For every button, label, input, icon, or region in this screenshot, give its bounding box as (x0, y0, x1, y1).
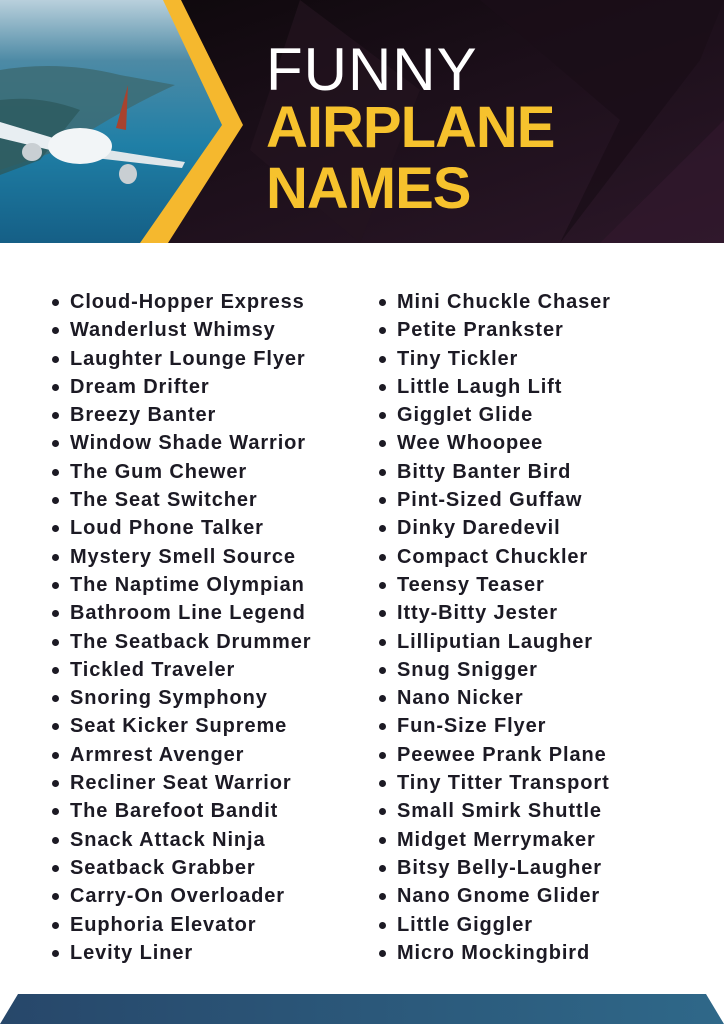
title (266, 36, 554, 221)
header banner (0, 0, 724, 243)
list: left column: Snack Attack Ninja (70, 829, 266, 851)
list: left column: Armrest Avenger (70, 744, 244, 766)
list: right column: Micro Mockingbird (397, 942, 590, 964)
list: right column: Little Giggler (397, 914, 533, 936)
list: right column: Dinky Daredevil (397, 517, 561, 539)
list: left column: Breezy Banter (70, 404, 216, 426)
list: left column: Dream Drifter (70, 376, 210, 398)
photo: sea and plane (0, 0, 240, 243)
list: right column: Tiny Tickler (397, 348, 518, 370)
list: left column: Levity Liner (70, 942, 193, 964)
list: left column: Seat Kicker Supreme (70, 715, 287, 737)
title: AIRPLANE (266, 95, 554, 160)
list: right column: Mini Chuckle Chaser (397, 291, 611, 313)
title: NAMES (266, 156, 470, 221)
list: left column: Snoring Symphony (70, 687, 268, 709)
list: left column: Recliner Seat Warrior (70, 772, 292, 794)
title: FUNNY (266, 36, 478, 103)
list: right column: Pint-Sized Guffaw (397, 489, 582, 511)
list: left column (52, 291, 311, 964)
list: left column: Mystery Smell Source (70, 546, 296, 568)
list: right column: Bitty Banter Bird (397, 461, 571, 483)
list: right column: Fun-Size Flyer (397, 715, 546, 737)
list: left column: Bathroom Line Legend (70, 602, 306, 624)
list: left column: Seatback Grabber (70, 857, 256, 879)
list: right column: Bitsy Belly-Laugher (397, 857, 602, 879)
list: right column: Teensy Teaser (397, 574, 545, 596)
icon: airplane (0, 85, 185, 184)
list: left column: The Gum Chewer (70, 461, 247, 483)
list: right column: Tiny Titter Transport (397, 772, 610, 794)
list: left column: The Seat Switcher (70, 489, 258, 511)
list: left column: The Seatback Drummer (70, 631, 311, 653)
footer bar (0, 994, 724, 1024)
list: right column: Snug Snigger (397, 659, 538, 681)
list: left column: The Naptime Olympian (70, 574, 305, 596)
list: right column: Wee Whoopee (397, 432, 543, 454)
list: left column: The Barefoot Bandit (70, 800, 278, 822)
list: left column: Laughter Lounge Flyer (70, 348, 306, 370)
list: right column: Midget Merrymaker (397, 829, 596, 851)
list: left column: Carry-On Overloader (70, 885, 285, 907)
list: right column: Itty-Bitty Jester (397, 602, 558, 624)
list: right column: Compact Chuckler (397, 546, 588, 568)
list: left column: Wanderlust Whimsy (70, 319, 276, 341)
list: right column: Nano Gnome Glider (397, 885, 600, 907)
list: left column: Cloud-Hopper Express (70, 291, 305, 313)
list: right column: Little Laugh Lift (397, 376, 562, 398)
list: left column: Window Shade Warrior (70, 432, 306, 454)
list: right column: Nano Nicker (397, 687, 524, 709)
list: right column: Small Smirk Shuttle (397, 800, 602, 822)
list: right column (379, 291, 611, 964)
list: left column: Euphoria Elevator (70, 914, 256, 936)
list: right column: Gigglet Glide (397, 404, 533, 426)
list: left column: Tickled Traveler (70, 659, 235, 681)
yellow chevron (140, 0, 243, 243)
list: right column: Petite Prankster (397, 319, 564, 341)
list: right column: Lilliputian Laugher (397, 631, 593, 653)
list: right column: Peewee Prank Plane (397, 744, 607, 766)
list: left column: Loud Phone Talker (70, 517, 264, 539)
